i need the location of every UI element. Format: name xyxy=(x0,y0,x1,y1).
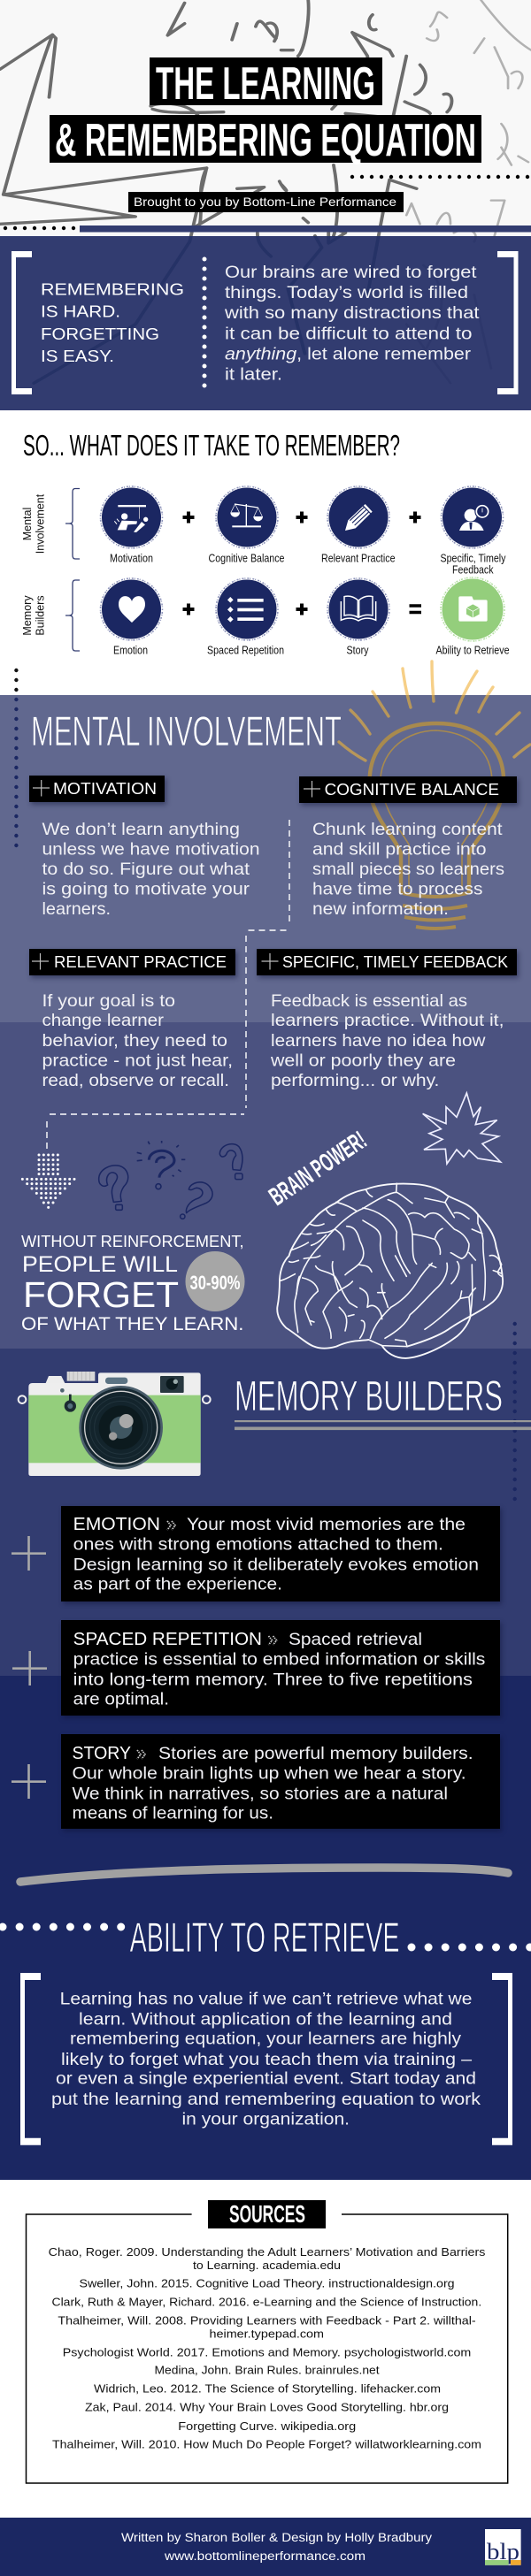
panel: ability to retrieve text: learn. Without application of the learning and xyxy=(79,2009,452,2029)
plus xyxy=(296,603,308,615)
label: relevant practice: RELEVANT PRACTICE xyxy=(54,953,227,971)
label: relevant practice xyxy=(29,949,235,975)
sources list: Widrich, Leo. 2012. The Science of Storytelling. lifehacker.com xyxy=(94,2382,441,2396)
text: feedback: Feedback is essential as xyxy=(271,991,467,1011)
text: cognitive balance: small pieces so learners xyxy=(312,860,504,879)
sources heading xyxy=(208,2200,326,2228)
card: story: means of learning for us. xyxy=(73,1803,273,1823)
label: specific timely feedback xyxy=(257,949,517,975)
badge: 30-90%: 30-90% xyxy=(189,1272,241,1294)
byline xyxy=(128,192,404,212)
text: feedback: well or poorly they are xyxy=(270,1051,456,1071)
icon: story xyxy=(327,578,389,640)
panel: ability to retrieve text xyxy=(20,1973,512,2145)
node labels: Feedback xyxy=(452,564,494,577)
stat: people will forget: PEOPLE WILL xyxy=(22,1252,178,1277)
label: motivation xyxy=(29,776,165,802)
sources list: Thalheimer, Will. 2010. How Much Do People Forget? willatworklearning.com xyxy=(52,2438,481,2451)
row label: mental involvement xyxy=(21,488,80,559)
text: feedback xyxy=(270,991,504,1090)
text: relevant practice xyxy=(42,991,233,1090)
sources list: Thalheimer, Will. 2008. Providing Learners with Feedback - Part 2. willthal- xyxy=(58,2314,476,2328)
badge: 30-90% xyxy=(186,1251,244,1311)
stat: people will forget: OF WHAT THEY LEARN. xyxy=(21,1313,244,1334)
row label: memory builders xyxy=(21,580,80,651)
card: story: Stories are powerful memory builders. xyxy=(158,1744,473,1763)
node labels: Motivation xyxy=(110,552,153,564)
headline: remembering is hard: FORGETTING xyxy=(41,325,159,343)
intro paragraph xyxy=(224,263,480,384)
equals xyxy=(409,606,421,612)
row label: memory builders: Builders xyxy=(34,595,46,636)
text: feedback: learners practice. Without it, xyxy=(271,1011,504,1030)
stat: people will forget: FORGET xyxy=(23,1274,179,1315)
stat: people will forget: WITHOUT REINFORCEMENT, xyxy=(21,1232,244,1250)
headline: remembering is hard xyxy=(41,279,184,365)
row label: mental involvement: Mental xyxy=(21,508,34,540)
card: spaced repetition xyxy=(61,1620,500,1716)
equation diagram xyxy=(21,486,510,656)
node labels: Spaced Repetition xyxy=(207,644,284,656)
headline: remembering is hard: IS EASY. xyxy=(41,347,114,365)
footer credits: Written by Sharon Boller & Design by Holly Bradbury xyxy=(121,2531,432,2544)
text: cognitive balance: and skill practice into xyxy=(312,840,487,860)
headline: remembering is hard: REMEMBERING xyxy=(41,279,184,299)
node labels: Relevant Practice xyxy=(321,552,396,564)
title line 1: THE LEARNING xyxy=(156,58,375,110)
brush stroke divider xyxy=(20,1868,508,1882)
logo: blp: blp xyxy=(487,2539,519,2565)
left bracket xyxy=(12,251,32,394)
byline: Brought to you by Bottom-Line Performance xyxy=(134,195,396,209)
card: spaced repetition: are optimal. xyxy=(73,1689,169,1708)
text: cognitive balance: Chunk learning content xyxy=(312,820,503,839)
logo: blp xyxy=(485,2529,521,2565)
card: emotion xyxy=(61,1506,500,1601)
icon: brain xyxy=(277,1183,503,1358)
panel: ability to retrieve text: remembering equation, your learners are highly xyxy=(70,2029,461,2049)
text: cognitive balance: have time to process xyxy=(312,880,483,899)
node labels xyxy=(110,552,510,656)
icon: relevant practice xyxy=(327,486,389,548)
dotted line right xyxy=(513,1324,517,1500)
icon: cognitive balance xyxy=(216,486,278,548)
sources list: Forgetting Curve. wikipedia.org xyxy=(178,2419,356,2433)
card: spaced repetition: Spaced retrieval xyxy=(289,1630,422,1649)
text: brain power: BRAIN POWER! xyxy=(265,1127,372,1212)
card: story: We think in narratives, so stories are a natural xyxy=(73,1784,448,1803)
sources list xyxy=(49,2245,486,2451)
text: feedback: performing... or why. xyxy=(271,1071,439,1090)
plus xyxy=(296,511,308,524)
label: cognitive balance: COGNITIVE BALANCE xyxy=(325,781,499,799)
icon: motivation xyxy=(101,486,163,548)
label: specific timely feedback: SPECIFIC, TIMELY FEEDBACK xyxy=(282,953,508,971)
text: motivation: unless we have motivation xyxy=(42,840,260,860)
panel: ability to retrieve text: Learning has no value if we can’t retrieve what we xyxy=(60,1990,472,2009)
panel: ability to retrieve text: or even a single experiential event. Start today and xyxy=(56,2069,476,2089)
label: cognitive balance xyxy=(299,776,517,803)
text: cognitive balance: new information. xyxy=(312,899,449,919)
text: motivation: is going to motivate your xyxy=(42,880,250,899)
card: emotion: EMOTION xyxy=(73,1515,160,1534)
card: story: Our whole brain lights up when we hear a story. xyxy=(73,1763,466,1783)
label: motivation: MOTIVATION xyxy=(53,780,157,798)
headline: remembering is hard: IS HARD. xyxy=(41,302,120,320)
text: motivation: We don’t learn anything xyxy=(42,820,240,839)
intro paragraph: it can be difficult to attend to xyxy=(225,324,473,343)
text: motivation: to do so. Figure out what xyxy=(42,860,250,879)
text: motivation: learners. xyxy=(42,899,111,919)
card: story: STORY xyxy=(73,1744,131,1763)
node labels: Ability to Retrieve xyxy=(435,644,510,656)
icon: question marks xyxy=(99,1141,242,1219)
node labels: Emotion xyxy=(113,644,148,656)
stat: people will forget xyxy=(21,1232,244,1334)
sources list: Psychologist World. 2017. Emotions and Memory. psychologistworld.com xyxy=(63,2346,471,2359)
plus: emotion xyxy=(12,1536,46,1571)
text: relevant practice: read, observe or recall. xyxy=(42,1071,229,1090)
card: story xyxy=(61,1734,500,1829)
text: relevant practice: practice - not just hear, xyxy=(42,1051,233,1071)
panel: intro xyxy=(0,236,531,410)
panel: ability to retrieve text: put the learning and remembering equation to work xyxy=(51,2090,481,2109)
card: spaced repetition: practice is essential to embed information or skills xyxy=(73,1649,486,1669)
panel: sources xyxy=(27,2200,508,2483)
heading: mental involvement: MENTAL INVOLVEMENT xyxy=(31,707,342,754)
sources list: Medina, John. Brain Rules. brainrules.net xyxy=(154,2364,380,2377)
node labels: Cognitive Balance xyxy=(209,552,285,564)
plus: spaced repetition xyxy=(12,1651,47,1685)
icon: dotted down arrow xyxy=(22,1155,74,1207)
text: relevant practice: behavior, they need to xyxy=(42,1031,227,1051)
sources list: Zak, Paul. 2014. Why Your Brain Loves Good Storytelling. hbr.org xyxy=(85,2401,449,2414)
card: emotion: Design learning so it deliberately evokes emotion xyxy=(73,1555,479,1574)
icon: spaced repetition xyxy=(216,578,278,640)
card: emotion: as part of the experience. xyxy=(73,1574,282,1594)
icon: starburst xyxy=(423,1093,501,1164)
sources list: Clark, Ruth & Mayer, Richard. 2016. e-Learning and the Science of Instruction. xyxy=(51,2296,481,2309)
icon: feedback xyxy=(441,486,503,548)
text: relevant practice: change learner xyxy=(42,1011,165,1030)
background bands xyxy=(0,695,531,2576)
text: feedback: learners have no idea how xyxy=(271,1031,486,1051)
card: emotion: ones with strong emotions attached to them. xyxy=(73,1534,443,1554)
plus xyxy=(182,511,195,524)
footer credits xyxy=(121,2531,432,2563)
sources list: to Learning. academia.edu xyxy=(193,2259,341,2272)
icon: light bulb xyxy=(339,661,530,929)
card: spaced repetition: SPACED REPETITION xyxy=(73,1630,262,1649)
footer credits: www.bottomlineperformance.com xyxy=(164,2549,366,2563)
intro paragraph: things. Today’s world is filled xyxy=(225,283,468,302)
right bracket xyxy=(497,251,519,394)
plus xyxy=(409,511,421,524)
intro paragraph: Our brains are wired to forget xyxy=(225,263,477,282)
text: relevant practice: If your goal is to xyxy=(42,991,175,1011)
node labels: Story xyxy=(347,644,369,656)
text: cognitive balance xyxy=(312,820,504,919)
title line 1 xyxy=(150,57,382,110)
sources heading: SOURCES xyxy=(229,2200,305,2228)
icon: emotion xyxy=(101,578,163,640)
sources list: Chao, Roger. 2009. Understanding the Adult Learners’ Motivation and Barriers xyxy=(49,2245,486,2259)
card: spaced repetition: into long-term memory. Three to five repetitions xyxy=(73,1670,473,1689)
node labels: Specific, Timely xyxy=(441,552,506,564)
panel: ability to retrieve text: likely to forget what you teach them via training – xyxy=(61,2050,472,2069)
sources list: heimer.typepad.com xyxy=(209,2328,324,2341)
intro paragraph: with so many distractions that xyxy=(224,303,480,323)
row label: mental involvement: Involvement xyxy=(34,493,46,554)
plus: story xyxy=(12,1764,46,1799)
text: motivation xyxy=(42,820,260,919)
icon: ability to retrieve xyxy=(441,577,504,641)
intro paragraph: anything , let alone remember xyxy=(225,345,472,364)
sources list: Sweller, John. 2015. Cognitive Load Theory. instructionaldesign.org xyxy=(80,2277,455,2290)
card: emotion: Your most vivid memories are the xyxy=(187,1515,466,1534)
row label: memory builders: Memory xyxy=(21,595,34,636)
intro paragraph: it later. xyxy=(225,364,282,384)
header photo background: maths sketches xyxy=(0,0,531,236)
icon: camera xyxy=(19,1372,211,1476)
panel: ability to retrieve text: in your organization. xyxy=(182,2109,350,2129)
plus xyxy=(182,603,195,615)
